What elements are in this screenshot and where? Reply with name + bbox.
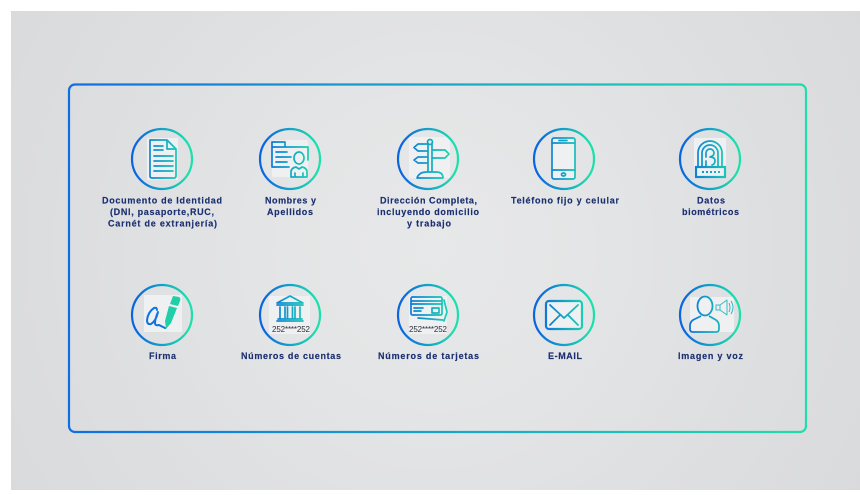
label: Nombres y Apellidos: Apellidos [267,207,313,217]
label: Documento de Identidad: Carnét de extranjería) [108,218,217,228]
rounded gradient frame [69,84,806,432]
icon: bank with account number: 252****252 [272,325,311,334]
item: Documento de Identidad [102,129,222,228]
label: Números de tarjetas: Números de tarjetas [378,351,479,361]
icon: signpost [398,129,458,189]
label: Teléfono fijo y celular: Teléfono fijo y celular [511,196,619,206]
icon: document [132,129,192,189]
label: Datos biométricos [682,196,739,217]
label: E-MAIL: E-MAIL [548,351,582,361]
icon: credit cards with number: 252****252 [409,325,448,334]
icon: person with speaker [680,285,740,345]
label: Datos biométricos: biométricos [682,207,739,217]
label: Dirección Completa [377,196,480,228]
item: Números de cuentas [241,285,341,361]
item: Números de tarjetas [378,285,479,361]
label: Firma: Firma [149,351,177,361]
icon: signature and pen [132,285,192,345]
item: Firma [132,285,192,361]
label: Imagen y voz: Imagen y voz [678,351,744,361]
label: Dirección Completa: y trabajo [407,218,452,228]
label: Documento de Identidad: Documento de Identidad [102,196,222,206]
item: E-MAIL [534,285,594,361]
label: Nombres y Apellidos [265,196,316,217]
icon: envelope [534,285,594,345]
item: Imagen y voz [678,285,744,361]
icon: folder with person [260,129,320,189]
icon: mobile phone [534,129,594,189]
label: Dirección Completa: Dirección Completa, [380,196,477,206]
item: Dirección Completa [377,129,480,228]
item: Datos biométricos [680,129,740,217]
label: Nombres y Apellidos: Nombres y [265,196,316,206]
label: Documento de Identidad: (DNI, pasaporte,RUC, [110,207,214,217]
label: Números de cuentas: Números de cuentas [241,351,341,361]
label: Documento de Identidad [102,196,222,228]
label: Datos biométricos: Datos [697,196,725,206]
item: Nombres y Apellidos [260,129,320,217]
icon: fingerprint scanner [680,129,740,189]
item: Teléfono fijo y celular [511,129,619,206]
label: Dirección Completa: incluyendo domicilio [377,207,480,217]
